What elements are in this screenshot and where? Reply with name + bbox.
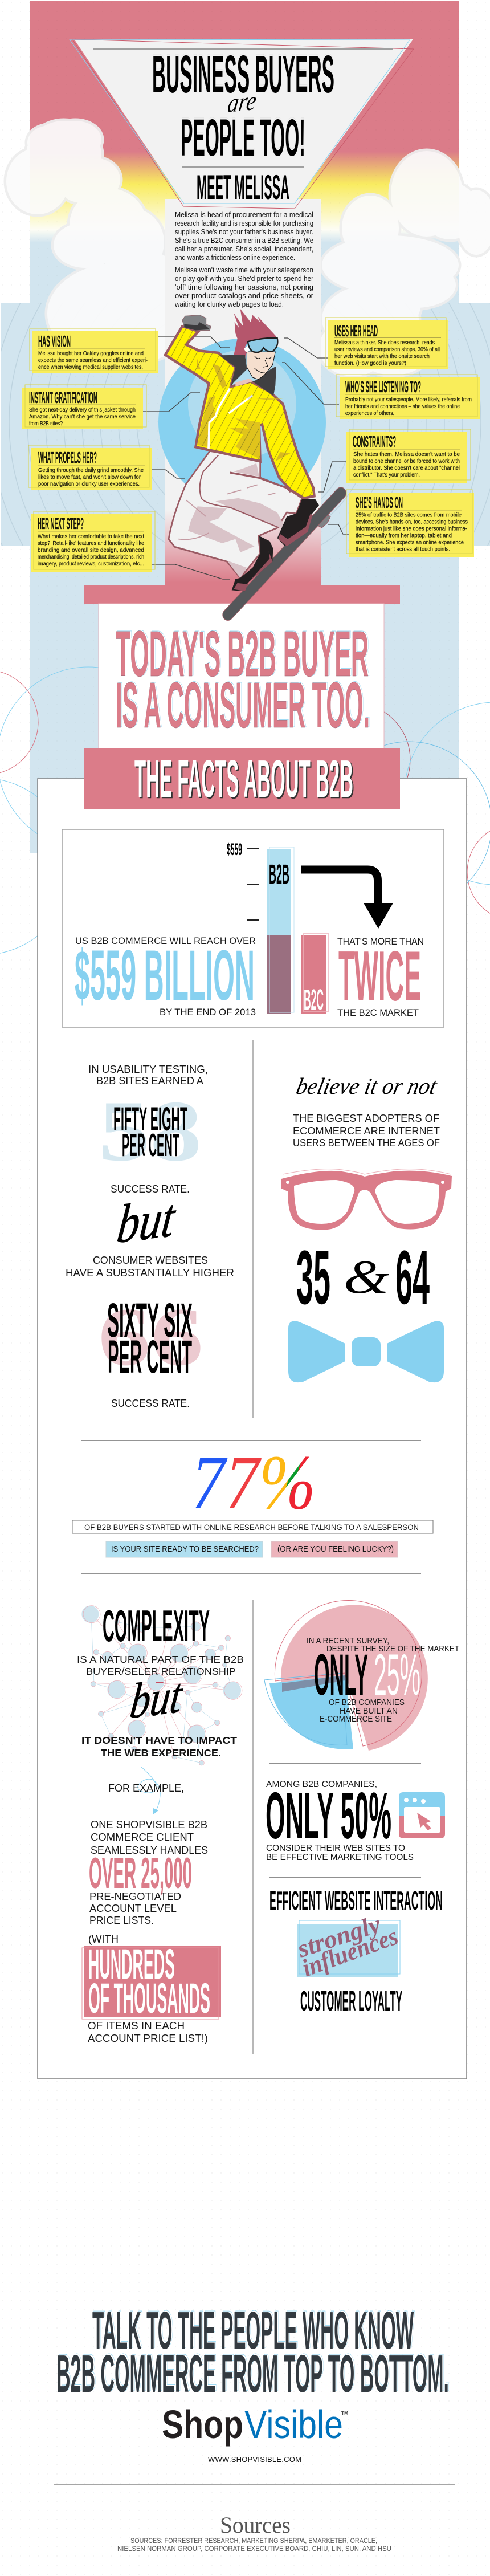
block: hundreds of thousands: HUNDREDS: [88, 1940, 175, 1988]
text: pre-negotiated: [89, 1891, 181, 1926]
face: [247, 352, 275, 380]
callout: what propels her: WHAT PROPELS HER?: [38, 449, 97, 466]
central column: [165, 199, 321, 587]
rule: [81, 1573, 421, 1574]
text: web experience: [81, 1735, 237, 1759]
text: built e-commerce: OF B2B COMPANIES: [329, 1698, 405, 1707]
red banner: the facts about b2b: [84, 748, 400, 809]
text: built e-commerce: HAVE BUILT AN: [340, 1707, 398, 1716]
callout: her next step: merchandising, detailed product descriptions, rich: [38, 554, 144, 560]
bar chart: $559: [227, 840, 242, 859]
stat: 35 & 64: 35: [296, 1235, 330, 1320]
panel: usability: FIFTY EIGHT: [113, 1101, 187, 1138]
callout: uses her head: Melissa's a thinker. She does research, reads: [334, 339, 435, 346]
text: among: AMONG B2B COMPANIES,: [266, 1780, 377, 1789]
text: consider: CONSIDER THEIR WEB SITES TO: [266, 1844, 405, 1853]
callout: she's hands on: that is consistent across all touch points.: [356, 546, 450, 553]
intro paragraphs: Melissa won't waste time with your salesperson: [175, 266, 313, 274]
pie slices: [264, 1601, 428, 1751]
callout: what propels her: poor navigation or clunky user experiences.: [38, 481, 140, 487]
text: biggest adopters: THE BIGGEST ADOPTERS OF: [293, 1112, 439, 1124]
panel: usability: [66, 1063, 234, 1409]
callout: what propels her: [28, 445, 152, 490]
divider upper: [252, 1040, 254, 1418]
callout: constraints: a distributor. She doesn't care about "channel: [353, 465, 460, 471]
icon: glasses: [281, 1169, 452, 1230]
panel: only 50%: [266, 1779, 445, 1862]
callout: has vision: ence when viewing medical supplier websites.: [38, 364, 143, 371]
text: pre-negotiated: PRE-NEGOTIATED: [89, 1891, 181, 1902]
sources heading: Sources: [220, 2512, 291, 2538]
url: WWW.SHOPVISIBLE.COM: [208, 2455, 301, 2464]
callout: has vision: HAS VISION: [38, 332, 71, 350]
text: OF THOUSANDS: [88, 1975, 210, 2022]
text: one shopvisible: ONE SHOPVISIBLE B2B: [91, 1819, 207, 1830]
hand behind board: [318, 510, 330, 528]
stat: only 25%: ONLY: [314, 1642, 368, 1707]
pants: [169, 451, 302, 578]
sources list: [117, 2537, 391, 2553]
callout: who's she listening to: experiences of others.: [345, 410, 394, 417]
red bar top: [84, 585, 400, 604]
panel: complexity: [77, 1601, 244, 2044]
intro paragraphs: research facility and is responsible for purchasing: [175, 219, 313, 227]
text: usability intro: B2B SITES EARNED A: [96, 1075, 204, 1086]
intro paragraphs: [174, 211, 313, 308]
text: recent survey: [307, 1637, 459, 1654]
text: biggest adopters: ECOMMERCE ARE INTERNET: [293, 1125, 440, 1137]
text: with: (WITH: [88, 1934, 119, 1945]
icon: bow tie: [288, 1321, 444, 1382]
script heading: believe it or not: [294, 1073, 440, 1099]
callout: constraints: bound to one channel or be forced to work with: [353, 458, 460, 465]
panel: complexity: OVER 25,000: [89, 1849, 192, 1898]
callout: has vision: [30, 329, 158, 373]
title line 2: [181, 107, 305, 167]
right boot: [277, 499, 319, 546]
panel: usability: SIXTY SIX: [107, 1293, 193, 1347]
intro paragraphs: over product catalogs and price sheets, or: [175, 292, 313, 300]
text: web experience: IT DOESN'T HAVE TO IMPACT: [81, 1735, 237, 1746]
text: success rate 2: SUCCESS RATE.: [111, 1397, 190, 1409]
callout: constraints: CONSTRAINTS?: [353, 433, 396, 450]
stat: 77%: 77%: [191, 1440, 316, 1525]
arrow: curl: [138, 1767, 160, 1814]
text: natural part: IS A NATURAL PART OF THE B2B: [77, 1654, 244, 1665]
text: COMPLEXITY: [103, 1601, 210, 1651]
text: biggest adopters: [293, 1112, 440, 1149]
rule: [270, 1877, 421, 1878]
callout: uses her head: USES HER HEAD: [334, 322, 378, 340]
block: strongly influences: influences: [299, 1922, 402, 1982]
callout: constraints: conflict." That's your problem.: [353, 471, 420, 478]
text: more than: THAT'S MORE THAN: [337, 937, 424, 947]
facts frame: [38, 779, 467, 2079]
text: items: [88, 2020, 208, 2044]
stat: sixty six per cent: 66: [98, 1291, 203, 1383]
text: one shopvisible: COMMERCE CLIENT: [91, 1832, 194, 1843]
callout: uses her head: her web visits start with the onsite search: [334, 353, 430, 360]
text: consider: BE EFFECTIVE MARKETING TOOLS: [266, 1853, 414, 1862]
intro paragraphs: Melissa is head of procurement for a medical: [175, 211, 313, 219]
panel: believe it or not: 64: [395, 1235, 430, 1320]
text: usability intro: IN USABILITY TESTING,: [88, 1063, 208, 1075]
snowboard: [228, 493, 341, 615]
stat: fifty eight per cent: 58: [99, 1083, 202, 1179]
callout: has vision: Melissa bought her Oakley goggles online and: [38, 350, 144, 357]
logo: shopvisible: Visible: [244, 2402, 343, 2447]
bar chart: B2B: [269, 860, 289, 890]
sources list: SOURCES: FORRESTER RESEARCH, MARKETING SHERPA, EMARKETER, ORACLE,: [130, 2537, 377, 2545]
callout: her next step: branding and overall site design, advanced: [38, 547, 144, 554]
logo: shopvisible: TM: [341, 2411, 348, 2416]
sky panel: [0, 1, 490, 853]
text: biggest adopters: USERS BETWEEN THE AGES OF: [293, 1137, 440, 1149]
text: consumer websites: [66, 1254, 234, 1279]
arrow: [301, 870, 393, 929]
text: web experience: THE WEB EXPERIENCE.: [101, 1747, 221, 1759]
panel: pie chart: 25%: [374, 1642, 420, 1707]
panel: pie chart: [264, 1601, 459, 1751]
text: items: OF ITEMS IN EACH: [88, 2020, 185, 2032]
block: strongly influences: strongly: [293, 1910, 384, 1963]
text: built e-commerce: [320, 1698, 405, 1724]
panel: market size: [62, 829, 444, 1027]
text: by the end of 2013: BY THE END OF 2013: [160, 1007, 256, 1018]
closing headline: [56, 2300, 450, 2403]
raised glove: [182, 315, 211, 330]
callout: instant gratification: She got next-day delivery of this jacket through: [29, 406, 136, 413]
text: consider: [266, 1844, 414, 1862]
intro paragraphs: She's a true B2C consumer in a B2B setting. We: [175, 237, 313, 245]
text: us b2b commerce: US B2B COMMERCE WILL REACH OVER: [75, 936, 256, 946]
clouds: [6, 121, 490, 376]
left boot: [232, 536, 273, 591]
rule: [81, 1440, 421, 1441]
callout: instant gratification: INSTANT GRATIFICATION: [29, 389, 97, 406]
icon: browser window: [399, 1792, 445, 1838]
text: the b2c market: THE B2C MARKET: [337, 1008, 419, 1018]
callout: uses her head: function. (How good is yours?): [334, 360, 406, 367]
rule: [54, 2484, 455, 2485]
goggles: [244, 338, 277, 352]
callout: her next step: What makes her comfortable to take the next: [38, 533, 144, 540]
callout: uses her head: [325, 318, 448, 369]
button: feeling lucky: [271, 1541, 398, 1557]
intro paragraphs: call her a prosumer. She's social, independent,: [175, 245, 313, 253]
text: recent survey: IN A RECENT SURVEY,: [307, 1637, 389, 1646]
text: natural part: [77, 1654, 244, 1677]
white headline box: [99, 604, 384, 748]
title trapezoid: MEET MELISSA: [197, 168, 289, 206]
callout: constraints: She hates them. Melissa doesn't want to be: [353, 451, 460, 458]
intro paragraphs: 'off' time following her passions, not poring: [175, 283, 313, 291]
button: ready to be searched: IS YOUR SITE READY TO BE SEARCHED?: [111, 1545, 259, 1554]
callout: her next step: step? 'Retail-like' features and functionality like: [38, 540, 144, 547]
text: built e-commerce: E-COMMERCE SITE: [320, 1715, 392, 1724]
text: for example: FOR EXAMPLE,: [108, 1783, 184, 1794]
panel: market size: B2C: [304, 983, 324, 1016]
divider lower: [252, 1600, 254, 2054]
text: success rate: SUCCESS RATE.: [111, 1183, 190, 1195]
title trapezoid: [70, 39, 414, 209]
bar chart: [227, 840, 328, 1016]
panel: efficient interaction: [270, 1886, 443, 2017]
hair: [234, 309, 277, 358]
intro paragraphs: supplies She's not your father's business buyer.: [175, 228, 313, 236]
panel: usability: PER CENT: [108, 1331, 192, 1383]
callout: what propels her: Getting through the daily grind smoothly. She: [38, 467, 144, 474]
word: but: but: [128, 1667, 186, 1729]
title "are": are: [226, 86, 259, 119]
callout: she's hands on: devices. She's hands-on, too, accessing business: [356, 519, 468, 526]
callout: has vision: expects the same seamless and efficient experi-: [38, 357, 148, 364]
text: recent survey: DESPITE THE SIZE OF THE MARKET: [326, 1645, 459, 1654]
logo: shopvisible: Shop: [162, 2402, 243, 2447]
stat: only 25%: [314, 1642, 420, 1707]
caption: online research: OF B2B BUYERS STARTED WITH ONLINE RESEARCH BEFORE TALKING TO A SALESPERSON: [84, 1523, 419, 1532]
text: pre-negotiated: ACCOUNT LEVEL: [89, 1903, 177, 1914]
headline: today's b2b buyer: [116, 617, 371, 741]
intro paragraphs: waiting for clunky web pages to load.: [174, 300, 284, 308]
jacket: [165, 326, 315, 498]
text: consumer websites: HAVE A SUBSTANTIALLY HIGHER: [66, 1267, 234, 1279]
panel: believe it or not: [281, 1073, 452, 1382]
callout: her next step: HER NEXT STEP?: [38, 515, 84, 532]
network graphic: [81, 1606, 242, 1765]
button: feeling lucky: (OR ARE YOU FEELING LUCKY?): [277, 1545, 394, 1554]
sources list: NIELSEN NORMAN GROUP, CORPORATE EXECUTIVE BOARD, CHIU, LIN, SUN, AND HSU: [117, 2545, 391, 2553]
callout: her next step: imagery, product reviews, customization, etc...: [38, 560, 144, 567]
callout: she's hands on: tion—equally from her laptop, tablet and: [356, 532, 452, 539]
rule: [270, 1763, 421, 1764]
neck and collar: [219, 355, 276, 396]
callout: her next step: [31, 511, 155, 572]
callout: she's hands on: SHE'S HANDS ON: [356, 494, 403, 511]
panel: usability: PER CENT: [122, 1127, 179, 1163]
text: pre-negotiated: PRICE LISTS.: [89, 1915, 154, 1926]
button: ready to be searched: [106, 1541, 263, 1557]
text: natural part: BUYER/SELER RELATIONSHIP: [86, 1666, 236, 1677]
callout: instant gratification: Amazon. Why can't she get the same service: [29, 413, 136, 420]
title line 1: [152, 43, 334, 104]
caption: online research: [72, 1520, 433, 1533]
callout: uses her head: user reviews and comparison shops. 30% of all: [334, 346, 440, 353]
text: one shopvisible: [91, 1819, 208, 1856]
callout: constraints: [346, 429, 471, 483]
stat: 35 & 64: &: [344, 1251, 390, 1304]
decorative circles: [0, 667, 490, 955]
logo: shopvisible: [162, 2402, 348, 2447]
text: usability intro: [88, 1063, 208, 1086]
intro paragraphs: or play golf with you. She'd prefer to spend her: [175, 275, 313, 283]
callout: instant gratification: [22, 385, 146, 429]
text: consumer websites: CONSUMER WEBSITES: [93, 1254, 208, 1266]
stat: 35 & 64: [296, 1235, 430, 1320]
callout: she's hands on: smartphone. She expects an online experience: [356, 539, 464, 546]
callout: instant gratification: from B2B sites?: [29, 420, 63, 427]
callout: she's hands on: [346, 490, 474, 557]
block: hundreds of thousands: [82, 1940, 221, 2022]
callout: who's she listening to: [336, 375, 480, 419]
callout: what propels her: likes to move fast, and won't slow down for: [38, 474, 141, 481]
intro paragraphs: and wants a frictionless online experience.: [175, 254, 295, 262]
text: one shopvisible: SEAMLESSLY HANDLES: [91, 1845, 208, 1856]
callout: who's she listening to: her friends and connections – she values the online: [345, 403, 460, 410]
callout: she's hands on: information just like she does personal informa-: [356, 526, 467, 532]
callout: she's hands on: 25% of traffic to B2B sites comes from mobile: [356, 512, 462, 519]
leader lines: [143, 337, 349, 579]
backdrop sun circles: [158, 339, 326, 506]
word: but: but: [114, 1187, 179, 1255]
text: items: ACCOUNT PRICE LIST!): [88, 2033, 208, 2044]
illustration: snowboarder: [165, 309, 341, 615]
